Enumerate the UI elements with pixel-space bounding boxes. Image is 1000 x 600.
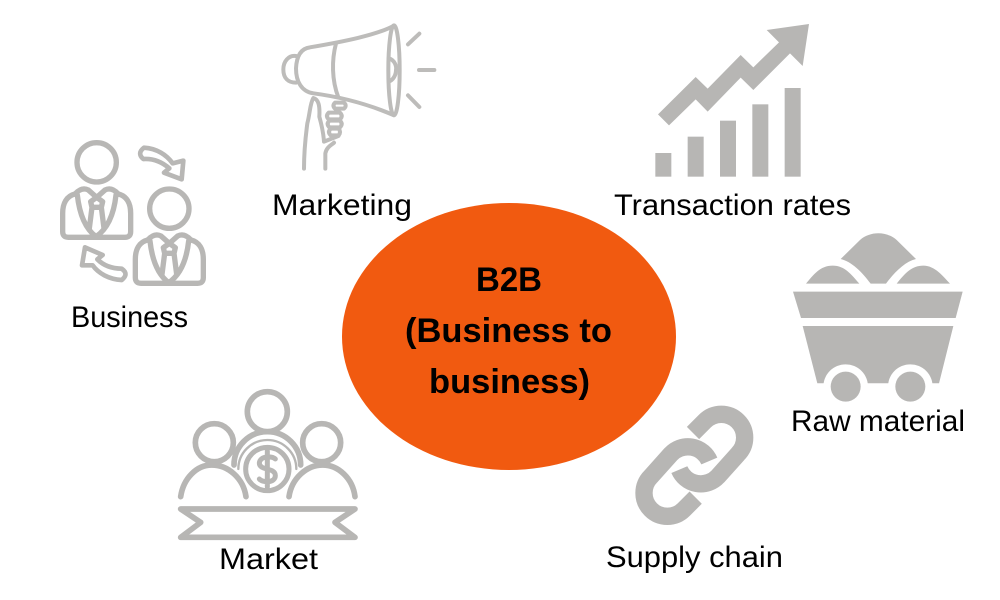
label: Business: Business — [71, 301, 188, 334]
central ellipse: B2B — [342, 203, 676, 470]
central ellipse: B2B: business) — [429, 363, 590, 401]
icon: mine cart with raw material — [793, 233, 963, 409]
label: Raw material: Raw material — [791, 405, 965, 438]
icon: growth chart with rising arrow — [655, 24, 809, 177]
central ellipse: B2B: B2B — [476, 261, 542, 299]
label: Marketing: Marketing — [272, 189, 412, 222]
icon: chain links — [644, 414, 745, 516]
icon: megaphone with hand — [283, 25, 434, 169]
label: Supply chain: Supply chain — [606, 541, 783, 574]
icon: market group with coin and banner — [181, 392, 355, 537]
label: Transaction rates: Transaction rates — [614, 189, 851, 222]
label: Market: Market — [219, 543, 319, 576]
central ellipse: B2B: (Business to — [405, 312, 612, 350]
icon: business people exchange — [63, 143, 203, 283]
